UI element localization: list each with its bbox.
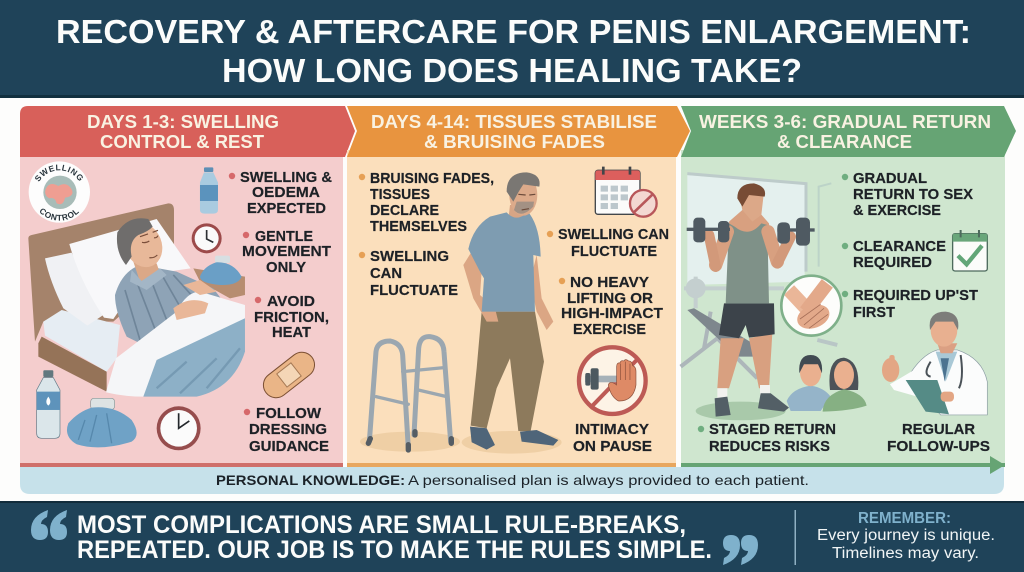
bullet: clearance required: [842, 238, 946, 271]
icon: doctor with clipboard: [882, 312, 987, 415]
bullet: no heavy lifting: [559, 274, 663, 338]
bullet: no heavy lifting: NO HEAVY: [570, 274, 649, 291]
panel: weeks 3-6: [681, 106, 1016, 464]
icon: ice bag on table: [200, 256, 242, 285]
quote banner: [0, 501, 1024, 572]
bullet: gradual return: [842, 170, 973, 219]
remember note: Timelines may vary.: [832, 545, 979, 562]
personal knowledge strip: PERSONAL KNOWLEDGE:: [216, 472, 405, 488]
bullet: gradual return: RETURN TO SEX: [853, 186, 973, 203]
bullet: swelling and oedema: EXPECTED: [247, 200, 326, 217]
panel: days 4-14: [347, 106, 690, 464]
remember note: [817, 510, 995, 562]
bullet: avoid friction: [254, 293, 329, 341]
bullet: gentle movement: ONLY: [266, 259, 306, 276]
illustration: man walking beside a walker: [360, 167, 657, 454]
bullet: swelling can fluctuate left: FLUCTUATE: [370, 282, 458, 299]
bullet: bruising fades: DECLARE: [370, 202, 439, 219]
bullet: follow dressing guidance: [244, 405, 329, 455]
bullet: bruising fades: TISSUES: [370, 186, 430, 203]
icon: water bottle top: [200, 167, 218, 214]
icon: dumbbell right: [777, 218, 815, 246]
bullet: gradual return: & EXERCISE: [853, 202, 941, 219]
icon: opening quote mark: [31, 510, 67, 540]
icon: calendar check: [953, 230, 987, 271]
bullet: swelling and oedema: OEDEMA: [252, 184, 320, 201]
bullet: no heavy lifting: HIGH-IMPACT: [561, 305, 663, 322]
illustration: patient in bed and recovery items: [28, 161, 315, 450]
quote text: [77, 511, 712, 564]
bullet: bruising fades: [359, 170, 494, 235]
panel: days 1-3: CONTROL & REST: [100, 131, 265, 152]
bullet: gentle movement: MOVEMENT: [242, 243, 331, 260]
caption: intimacy on pause: ON PAUSE: [573, 438, 652, 455]
bullet: clearance required: REQUIRED: [853, 254, 932, 271]
bullet: follow dressing guidance: FOLLOW: [256, 405, 322, 422]
illustration: man lifting dumbbells with gym, couple and doctor: [681, 174, 987, 420]
bullet: required up'st first: [842, 287, 978, 321]
icon: couple: [787, 355, 867, 412]
panel: days 4-14: DAYS 4-14: TISSUES STABILISE: [371, 111, 657, 132]
caption: intimacy on pause: INTIMACY: [575, 421, 649, 438]
quote text: MOST COMPLICATIONS ARE SMALL RULE-BREAKS,: [77, 511, 686, 539]
bullet: avoid friction: HEAT: [272, 324, 311, 341]
icon: dumbbell left: [687, 218, 730, 242]
bullet: swelling and oedema: [229, 169, 332, 217]
personal knowledge strip: A personalised plan is always provided to each patient.: [408, 472, 809, 488]
caption: regular follow-ups: REGULAR: [902, 421, 975, 438]
bullet: swelling can fluctuate right: SWELLING CAN: [558, 226, 669, 243]
caption: regular follow-ups: [887, 421, 990, 455]
bullet: bruising fades: BRUISING FADES,: [370, 170, 494, 187]
title banner: [0, 0, 1024, 98]
quote text: REPEATED. OUR JOB IS TO MAKE THE RULES SIMPLE.: [77, 536, 712, 564]
bullet: swelling can fluctuate left: CAN: [370, 265, 402, 282]
bullet: swelling can fluctuate left: SWELLING: [370, 248, 449, 265]
bullet: avoid friction: AVOID: [267, 293, 315, 310]
panel: weeks 3-6: WEEKS 3-6: GRADUAL RETURN: [699, 111, 991, 132]
icon: clock top: [192, 223, 222, 253]
icon: ice bag bottom: [67, 398, 137, 447]
bullet: gradual return: GRADUAL: [853, 170, 927, 187]
title banner: RECOVERY & AFTERCARE FOR PENIS ENLARGEMENT:: [56, 13, 971, 50]
icon: holding hands: [781, 276, 841, 336]
swelling control badge: [28, 161, 90, 223]
icon: calendar with prohibition: [595, 167, 657, 217]
bullet: no heavy lifting: EXERCISE: [573, 321, 646, 338]
icon: bandage: [258, 347, 320, 403]
caption: regular follow-ups: FOLLOW-UPS: [887, 438, 990, 455]
bullet: swelling can fluctuate left: [359, 248, 458, 299]
caption: intimacy on pause: [573, 421, 652, 455]
timeline arrow: [20, 456, 1005, 474]
bullet: gentle movement: GENTLE: [255, 228, 313, 245]
bullet: required up'st first: REQUIRED UP'ST: [853, 287, 978, 304]
bullet: staged return: [698, 421, 836, 455]
personal knowledge strip: [20, 467, 1004, 494]
title banner: HOW LONG DOES HEALING TAKE?: [222, 52, 802, 89]
swelling control badge: SWELLING: [35, 164, 83, 182]
bullet: follow dressing guidance: GUIDANCE: [249, 438, 329, 455]
bullet: gentle movement: [242, 228, 331, 276]
remember note: Every journey is unique.: [817, 527, 995, 544]
bullet: required up'st first: FIRST: [853, 304, 895, 321]
icon: clock bottom: [157, 406, 201, 450]
icon: walker: [368, 337, 451, 450]
icon: closing quote mark: [723, 535, 758, 565]
remember note: REMEMBER:: [858, 510, 951, 527]
panel: days 1-3: [20, 106, 355, 463]
bullet: follow dressing guidance: DRESSING: [249, 421, 327, 438]
panel: days 4-14: & BRUISING FADES: [424, 131, 605, 152]
panel: weeks 3-6: & CLEARANCE: [777, 131, 912, 152]
bullet: clearance required: CLEARANCE: [853, 238, 946, 255]
icon: water bottle bottom: [37, 370, 60, 438]
swelling control badge: CONTROL: [40, 208, 80, 221]
bullet: bruising fades: THEMSELVES: [370, 218, 467, 235]
bullet: no heavy lifting: LIFTING OR: [567, 290, 653, 307]
bullet: swelling and oedema: SWELLING &: [240, 169, 332, 186]
panel: days 1-3: DAYS 1-3: SWELLING: [87, 111, 279, 132]
bullet: avoid friction: FRICTION,: [254, 309, 329, 326]
bullet: staged return: REDUCES RISKS: [709, 438, 830, 455]
icon: no lifting sign: [579, 347, 646, 414]
bullet: staged return: STAGED RETURN: [709, 421, 836, 438]
bullet: swelling can fluctuate right: [547, 226, 669, 260]
bullet: swelling can fluctuate right: FLUCTUATE: [571, 243, 657, 260]
